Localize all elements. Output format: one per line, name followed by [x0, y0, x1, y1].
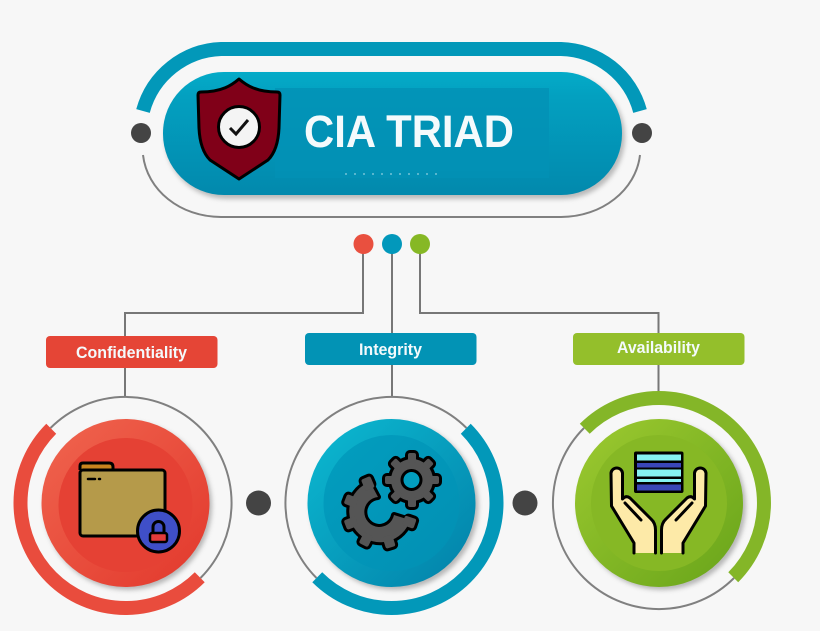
panel: confidentiality circle [20, 397, 232, 608]
separator dot 1 [246, 490, 271, 516]
blue node dot [382, 234, 402, 254]
thin ring [285, 397, 466, 578]
header right dot [632, 123, 652, 143]
thin ring [50, 397, 232, 578]
header left dot [131, 123, 151, 143]
icon: folder with padlock [80, 463, 180, 552]
label: Confidentiality [46, 336, 218, 368]
header frame: bottom arc [143, 155, 640, 217]
title pill [163, 72, 625, 199]
label: Availability [573, 333, 744, 365]
thick red arc [20, 429, 200, 608]
icon: shield with check [198, 79, 280, 179]
label: Integrity: Integrity [359, 340, 423, 359]
label: Integrity [305, 333, 476, 365]
label: Availability: Availability [617, 338, 700, 357]
green node dot [410, 234, 430, 254]
panel: availability circle [553, 398, 764, 609]
icon: gears [344, 453, 439, 549]
connector: blue to integrity [391, 250, 393, 397]
icon: hands holding server [611, 452, 706, 553]
thick green arc [585, 398, 764, 577]
connector: green to availability [420, 250, 658, 392]
separator dot 2 [512, 490, 538, 516]
title text: CIA TRIAD [304, 106, 514, 157]
label: Confidentiality: Confidentiality [76, 343, 188, 362]
thick blue arc [317, 429, 497, 608]
thin ring [553, 428, 734, 609]
red node dot [354, 234, 374, 254]
connector: red to confidentiality [125, 250, 363, 397]
header frame: top arc [143, 49, 640, 111]
panel: integrity circle [285, 397, 497, 608]
